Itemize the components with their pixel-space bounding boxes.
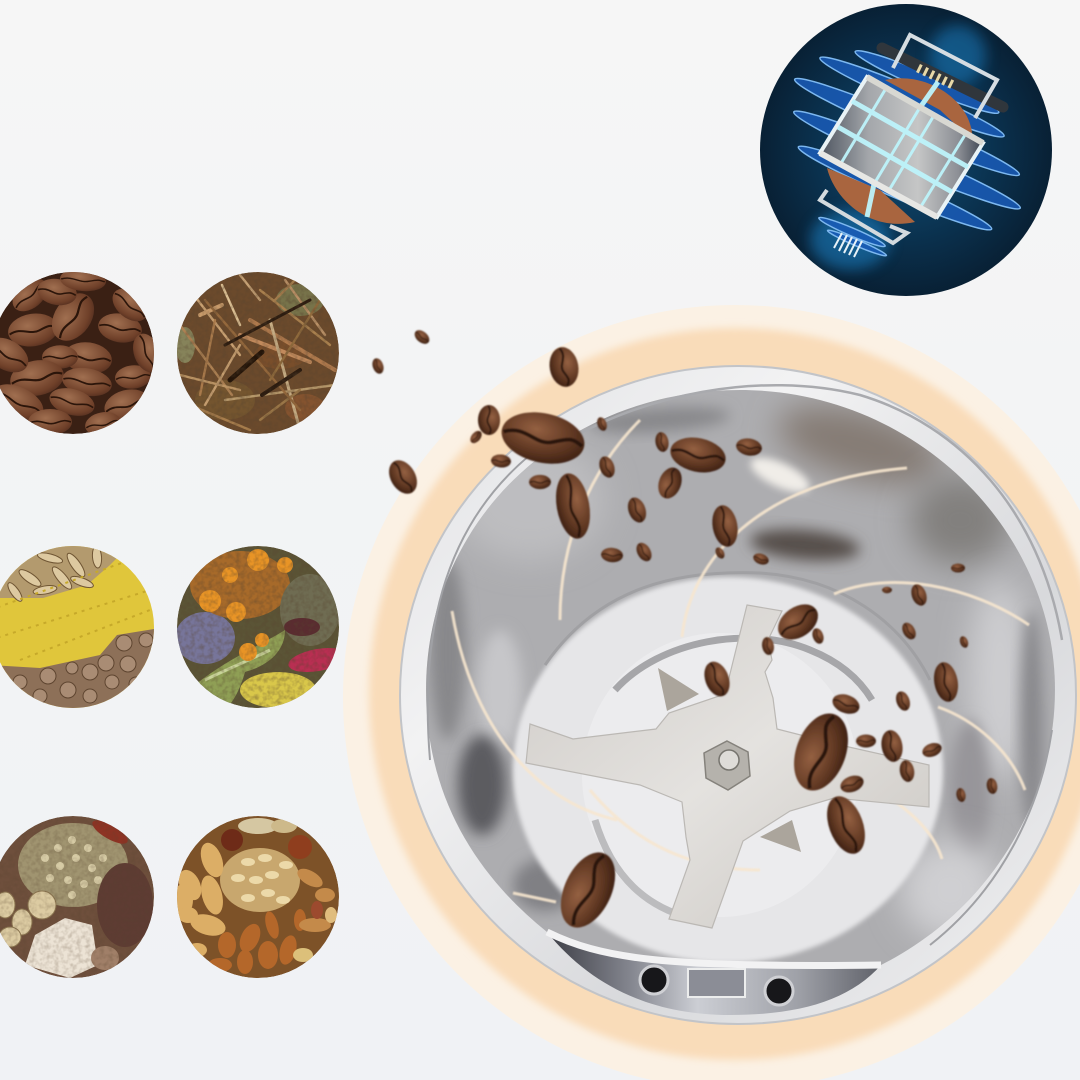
grinder steel bowl: [400, 366, 1076, 1024]
outer rim: [400, 366, 1076, 1024]
flying coffee beans: [370, 327, 999, 936]
icon: spinning motor: [760, 4, 1052, 296]
swirl light streaks: [452, 420, 1029, 902]
shaft and top bracket: [820, 35, 1003, 243]
socket holes: [640, 966, 793, 1005]
bottom plate: [547, 932, 881, 1015]
food circle: mixed spices: [0, 816, 154, 978]
inner wall: [426, 390, 1055, 966]
motor cylinder: [820, 77, 983, 217]
food circle: nuts: [173, 816, 339, 978]
wall shading: [430, 390, 1044, 940]
bowl floor: [513, 577, 943, 963]
grinding blade: [526, 605, 929, 928]
blue rotating rings: [790, 44, 1024, 258]
food circle: dried herbs: [177, 272, 339, 434]
food circle: grains and seeds: [0, 540, 160, 710]
bottom lip: [547, 932, 881, 966]
copper windings: [827, 78, 972, 224]
food circle: dried flowers: [177, 546, 339, 708]
blade nut: [704, 741, 750, 790]
rim inner and outer lines: [428, 385, 1062, 945]
food circle: coffee beans: [0, 272, 154, 434]
grinder glow ring: [343, 305, 1080, 1080]
